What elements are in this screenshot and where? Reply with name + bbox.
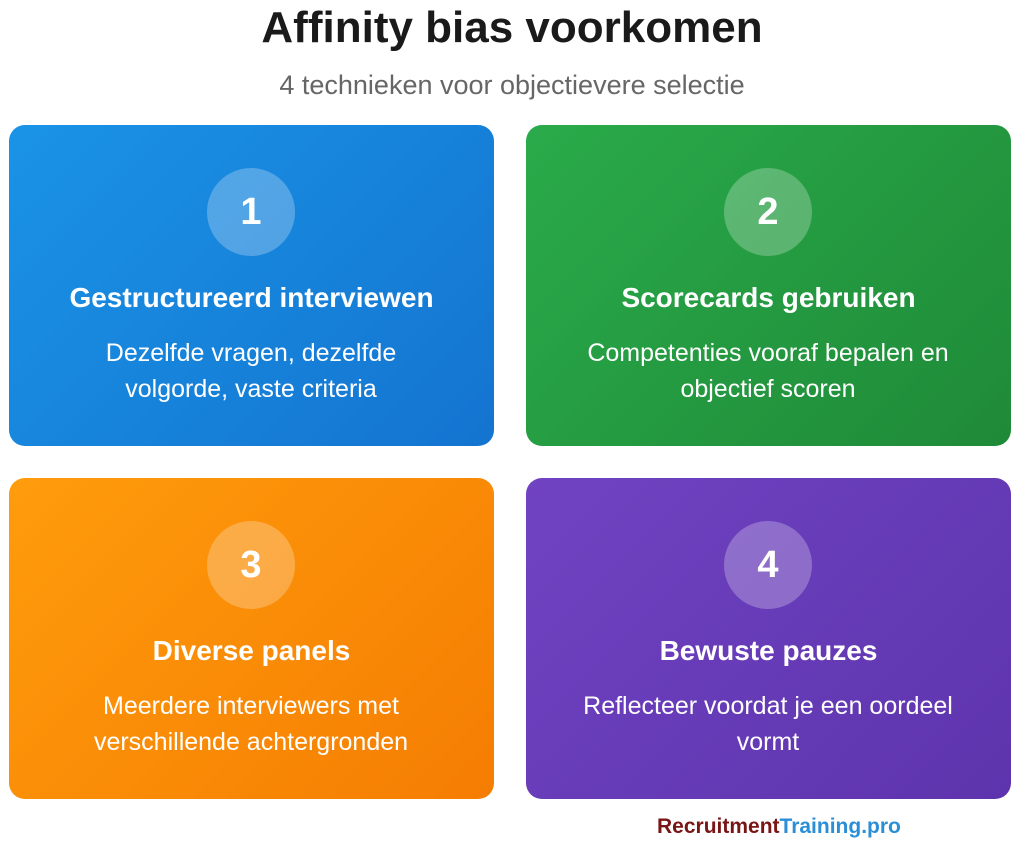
- icon: number 4: 4: [757, 544, 779, 586]
- heading 2: Scorecards gebruiken: [621, 282, 916, 313]
- heading 1: Gestructureerd interviewen: [69, 282, 434, 313]
- icon: number 3: [207, 521, 295, 609]
- icon: number 1: [207, 168, 295, 256]
- text 1: Dezelfde vragen, dezelfde volgorde, vaste criteria: [106, 339, 396, 403]
- heading 3: Diverse panels: [153, 635, 350, 666]
- text 4: Reflecteer voordat je een oordeel vormt: [583, 692, 953, 756]
- subtitle: 4 technieken voor objectievere selectie: [279, 70, 745, 100]
- title: Affinity bias voorkomen: [261, 3, 763, 52]
- text 3: Meerdere interviewers met verschillende achtergronden: [94, 692, 408, 756]
- text 2: Competenties vooraf bepalen en objectief scoren: [587, 339, 949, 403]
- logo: RecruitmentTraining.pro: [657, 815, 901, 838]
- panel: 2: [526, 125, 1011, 446]
- icon: number 3: 3: [240, 544, 262, 586]
- icon: number 4: [724, 521, 812, 609]
- heading 4: Bewuste pauzes: [660, 635, 877, 666]
- panel: 3: [9, 478, 494, 799]
- icon: number 1: 1: [240, 191, 262, 233]
- icon: number 2: 2: [757, 191, 779, 233]
- panel: 1: [9, 125, 494, 446]
- icon: number 2: [724, 168, 812, 256]
- panel: 4: [526, 478, 1011, 799]
